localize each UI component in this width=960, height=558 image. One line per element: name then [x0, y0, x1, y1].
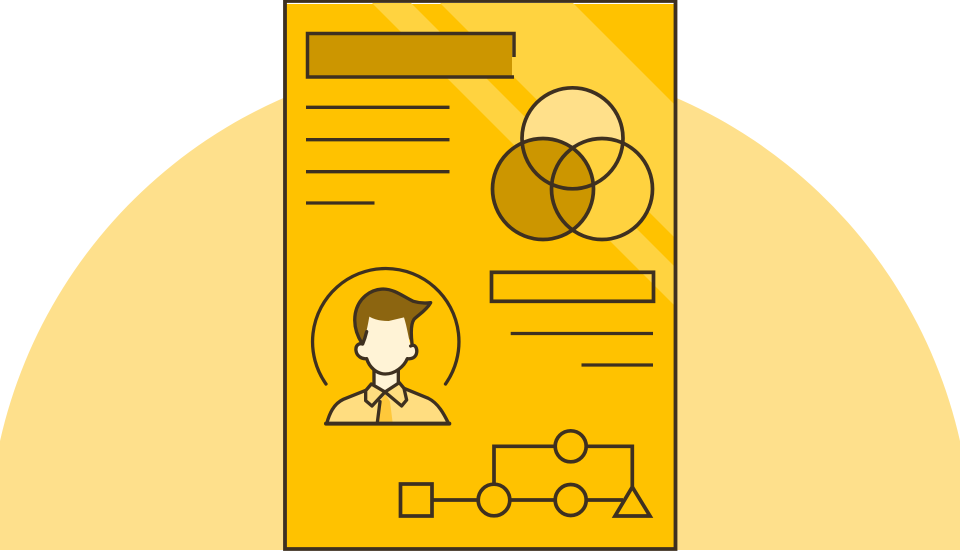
- icon: person portrait: [313, 269, 459, 424]
- circle node two: [555, 484, 586, 516]
- text lines: left block: [306, 107, 450, 203]
- hair outline: [355, 289, 431, 343]
- outlined box: [492, 272, 654, 301]
- square node: [400, 484, 432, 516]
- circle node one: [478, 484, 510, 516]
- diagonal light stripes: [372, 3, 674, 305]
- shirt base line: [326, 418, 449, 430]
- shirt: [327, 387, 449, 424]
- document background: [285, 1, 676, 549]
- face outline: [356, 332, 417, 374]
- circle node top: [555, 431, 586, 462]
- hair fill: [355, 289, 431, 343]
- document border: [285, 1, 676, 549]
- face: [356, 317, 417, 374]
- panel: document sheet: [285, 1, 676, 549]
- collar: [366, 383, 407, 406]
- venn diagram: [492, 88, 652, 240]
- tie: [377, 394, 393, 423]
- white top highlight: [286, 2, 674, 4]
- text lines: right block: [511, 334, 653, 365]
- triangle node: [615, 487, 650, 516]
- halo arc: [313, 269, 459, 384]
- neck: [374, 367, 398, 392]
- connectors: [433, 446, 632, 500]
- flow diagram: [400, 431, 650, 516]
- title bar: [308, 34, 514, 77]
